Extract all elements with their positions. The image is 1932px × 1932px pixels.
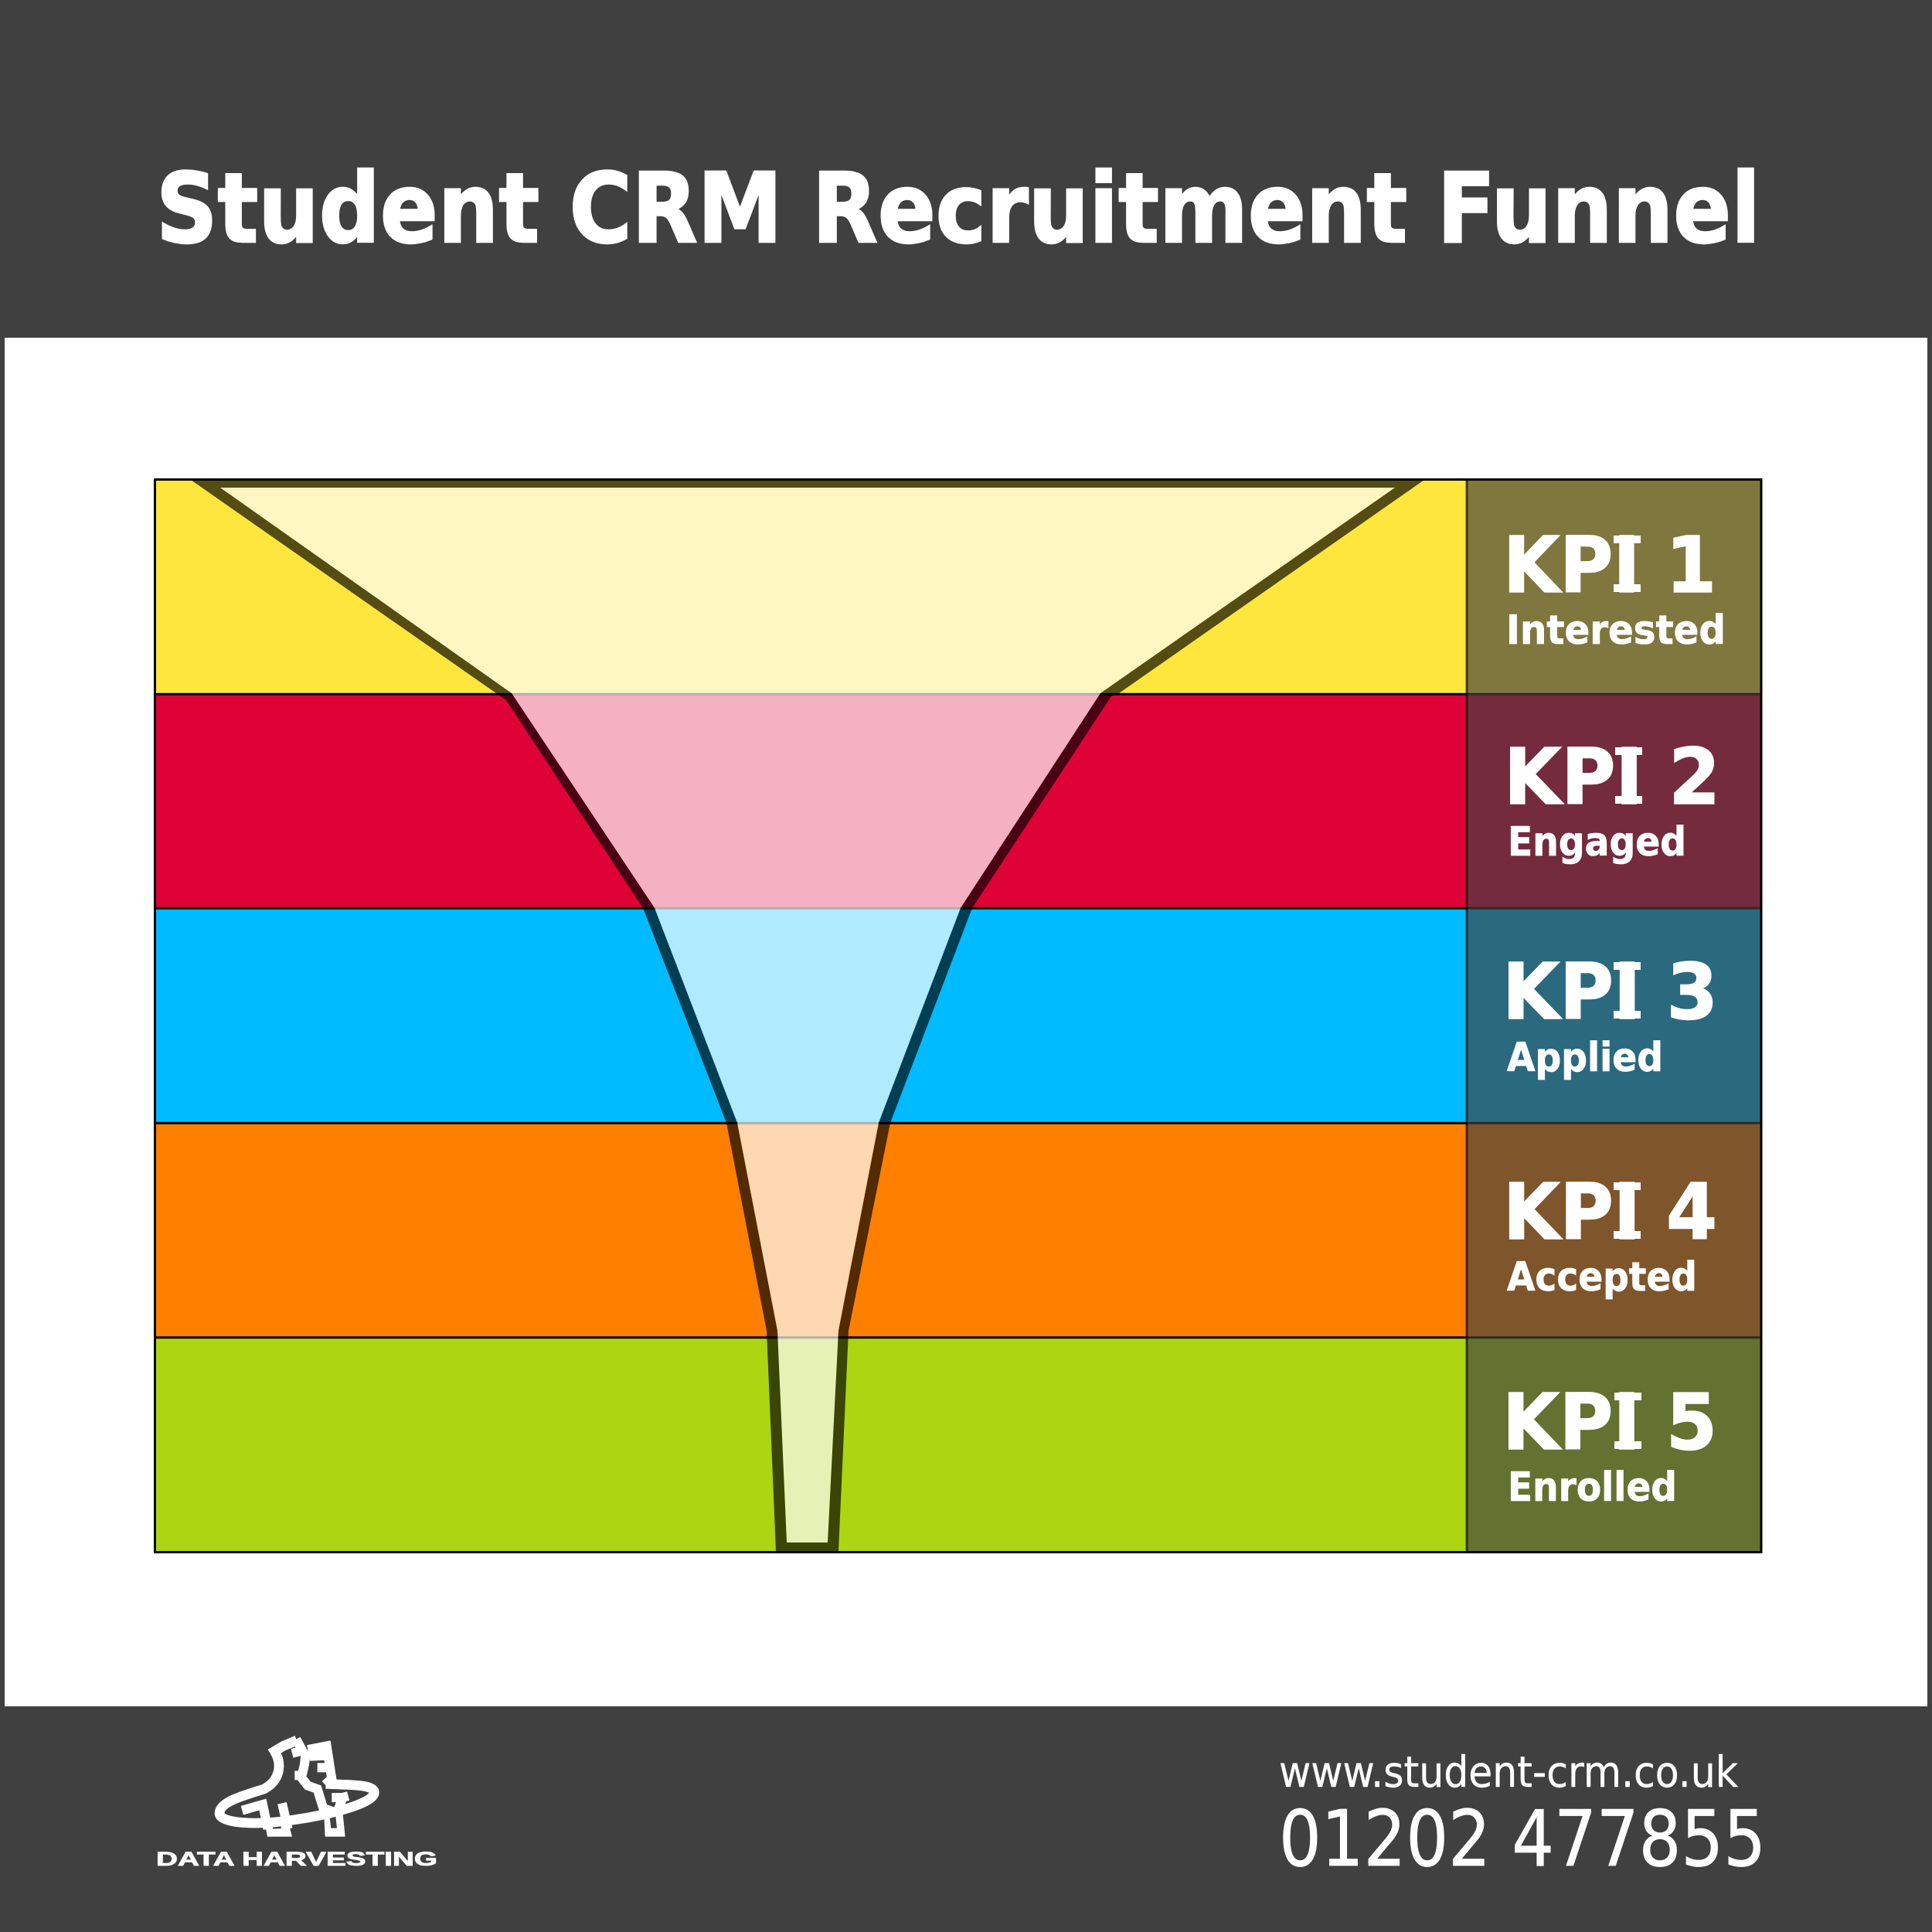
- phone number: 01202 477855: [1279, 1794, 1766, 1884]
- panel: KPI 2 Engaged: [1467, 694, 1761, 908]
- Engaged label: Engaged: [1508, 819, 1686, 866]
- panel: KPI 3 Applied: [1467, 908, 1761, 1123]
- KPI 1 label: KPI 1: [1503, 520, 1716, 611]
- funnel interior: [220, 488, 1395, 1543]
- company name: DATA HARVESTING: [156, 1849, 437, 1870]
- KPI 3 label: KPI 3: [1502, 947, 1718, 1037]
- panel: KPI 1 Interested: [1467, 479, 1761, 694]
- title: Student CRM Recruitment Funnel: [156, 153, 1760, 265]
- funnel: [191, 480, 1424, 1551]
- band: KPI 1 yellow: [155, 479, 1761, 694]
- Applied label: Applied: [1507, 1035, 1663, 1081]
- band: KPI 4 orange: [155, 1123, 1761, 1338]
- panel: KPI 5 Enrolled: [1467, 1338, 1761, 1552]
- KPI column divider and chart frame: [155, 479, 1761, 1552]
- KPI 5 label: KPI 5: [1502, 1377, 1717, 1468]
- band: KPI 2 red: [155, 694, 1761, 908]
- website url: www.student-crm.co.uk: [1279, 1747, 1738, 1797]
- KPI 4 label: KPI 4: [1503, 1167, 1717, 1257]
- Enrolled label: Enrolled: [1508, 1464, 1677, 1511]
- Interested label: Interested: [1506, 607, 1726, 654]
- white content panel: [5, 338, 1927, 1706]
- panel: KPI 4 Accepted: [1467, 1123, 1761, 1338]
- Accepted label: Accepted: [1507, 1254, 1697, 1301]
- icon: boot and orbit mark: [219, 1740, 374, 1837]
- band: KPI 5 green: [155, 1338, 1761, 1552]
- logo: Data Harvesting: [156, 1740, 437, 1870]
- KPI 2 label: KPI 2: [1504, 732, 1720, 822]
- band: KPI 3 blue: [155, 908, 1761, 1123]
- funnel outline: [191, 480, 1424, 1551]
